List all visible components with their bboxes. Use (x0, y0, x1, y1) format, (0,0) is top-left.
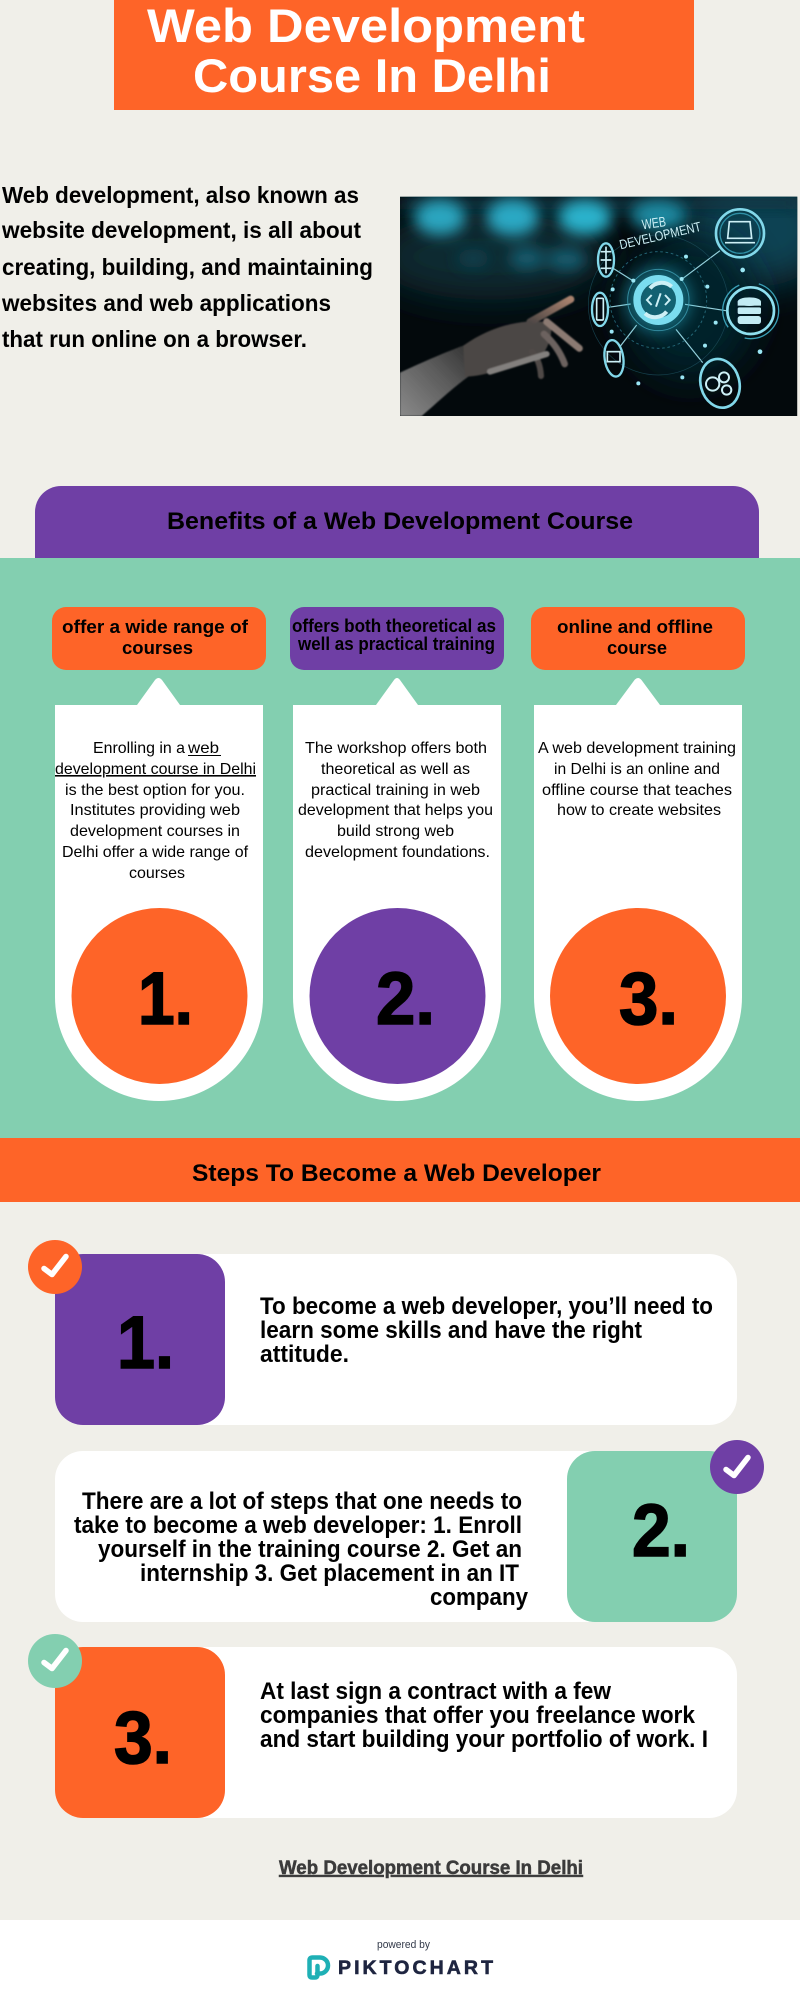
hologram dots (610, 255, 762, 385)
hologram icons (597, 222, 755, 395)
step 1 (28, 1240, 737, 1425)
title text: Course In Delhi (193, 49, 551, 102)
benefit 3 label pill: online and offline (557, 616, 713, 637)
section heading: steps: Steps To Become a Web Developer (192, 1160, 601, 1187)
benefit 1 text: Delhi offer a wide range of (62, 844, 249, 861)
blurred lights (414, 199, 687, 270)
image: hand touching web development hologram (400, 196, 798, 416)
icon: piktochart logo (310, 1958, 328, 1978)
step 3 text: companies that offer you freelance work (260, 1702, 696, 1729)
benefit 3 label pill: course (607, 637, 667, 658)
step 2 text: take to become a web developer: 1. Enroll (74, 1512, 522, 1539)
intro paragraph: websites and web applications (1, 290, 331, 316)
benefit 1 text: Enrolling in a (93, 740, 185, 757)
benefit 1 (52, 607, 266, 1101)
title text: Web Development (147, 0, 585, 52)
step 2 text: There are a lot of steps that one needs to (82, 1488, 522, 1515)
benefit 3 number badge: 3. (619, 957, 678, 1040)
piktochart wordmark: PIKTOCHART (338, 1957, 493, 1979)
hologram rings (588, 209, 779, 412)
section heading: steps (0, 1138, 800, 1202)
step 3 check badge (28, 1634, 82, 1688)
hologram caption: WEB (641, 213, 667, 232)
benefit 1 text: is the best option for you. (65, 782, 245, 799)
benefit 1 text: web (187, 740, 219, 757)
benefit 3 card (534, 678, 742, 1101)
intro paragraph (1, 182, 373, 352)
title text (147, 0, 585, 102)
benefit 1 label pill (52, 607, 266, 670)
benefit 3 number badge (550, 908, 726, 1084)
step 1 text: To become a web developer, you’ll need to (260, 1293, 713, 1320)
database icon (738, 297, 761, 324)
link text: Web Development Course In Delhi (279, 1858, 583, 1879)
benefit 1 text: development course in Delhi (55, 761, 256, 778)
panel: benefits (0, 558, 800, 1138)
step 3 text: and start building your portfolio of work. I (260, 1726, 708, 1753)
step 2 check badge (710, 1440, 764, 1494)
step 3 card (55, 1647, 737, 1818)
benefit 3 text: A web development training (538, 740, 736, 757)
benefit 1 text: development courses in (70, 823, 240, 840)
benefit 2 (290, 607, 504, 1101)
section heading: benefits (35, 486, 759, 558)
step 1 number tile: 1. (117, 1301, 174, 1384)
step 3 number tile (55, 1647, 225, 1818)
step 1 text: attitude. (260, 1341, 349, 1368)
hologram links (608, 251, 726, 363)
intro paragraph: that run online on a browser. (2, 326, 307, 352)
hologram caption (619, 217, 700, 250)
benefit 3 text: offline course that teaches (542, 782, 732, 799)
benefit 3 text (538, 740, 736, 819)
benefit 3 (531, 607, 745, 1101)
step 2 text: yourself in the training course 2. Get an (98, 1536, 522, 1563)
step 1 check badge (28, 1240, 82, 1294)
benefit 2 text: practical training in web (311, 782, 480, 799)
section heading: benefits: Benefits of a Web Development Course (167, 508, 633, 535)
intro paragraph: creating, building, and maintaining (2, 254, 373, 280)
benefit 2 label pill: well as practical training (297, 633, 495, 654)
hand (400, 299, 579, 416)
intro paragraph: Web development, also known as (2, 182, 359, 208)
step 3 (28, 1634, 737, 1818)
benefit 2 text: The workshop offers both (305, 740, 487, 757)
step 2 number tile (567, 1451, 737, 1622)
benefit 1 label pill: offer a wide range of (62, 616, 249, 637)
benefit 1 text: courses (129, 865, 185, 882)
powered by label: powered by (377, 1939, 430, 1951)
benefit 2 label pill: offers both theoretical as (292, 615, 496, 636)
step 2 text (74, 1488, 529, 1611)
step 1 text: learn some skills and have the right (260, 1317, 642, 1344)
benefit 1 number badge (72, 908, 248, 1084)
step 1 card (55, 1254, 737, 1425)
benefit 1 card (55, 678, 263, 1101)
step 3 number tile: 3. (114, 1696, 172, 1779)
benefit 3 text: in Delhi is an online and (554, 761, 720, 778)
step 3 text (260, 1678, 708, 1753)
benefit 2 number badge: 2. (376, 957, 435, 1040)
step 2 text: company (430, 1584, 529, 1611)
benefit 2 text (298, 740, 493, 861)
benefit 1 text: Institutes providing web (70, 802, 240, 819)
benefit 2 number badge (310, 908, 486, 1084)
step 1 number tile (55, 1254, 225, 1425)
intro paragraph: website development, is all about (1, 217, 361, 243)
step 2 card (55, 1451, 737, 1622)
benefit 1 text (55, 740, 256, 882)
step 2 number tile: 2. (632, 1489, 690, 1572)
benefit 2 text: development that helps you (298, 802, 493, 819)
step 1 text (260, 1293, 713, 1368)
benefit 2 text: theoretical as well as (321, 761, 470, 778)
step 2 text: internship 3. Get placement in an IT (140, 1560, 519, 1587)
step 3 text: At last sign a contract with a few (260, 1678, 611, 1705)
benefit 2 text: build strong web (337, 823, 454, 840)
benefit 1 number badge: 1. (138, 957, 193, 1040)
benefit 2 card (293, 678, 501, 1101)
title banner (114, 0, 694, 110)
hologram caption: DEVELOPMENT (618, 219, 703, 252)
footer (0, 1920, 800, 2000)
benefit 3 label pill (531, 607, 745, 670)
benefit 2 label pill (290, 607, 504, 670)
step 2 (55, 1440, 764, 1622)
benefit 1 label pill: courses (122, 637, 193, 658)
benefit 3 text: how to create websites (557, 802, 721, 819)
benefit 2 text: development foundations. (305, 844, 490, 861)
